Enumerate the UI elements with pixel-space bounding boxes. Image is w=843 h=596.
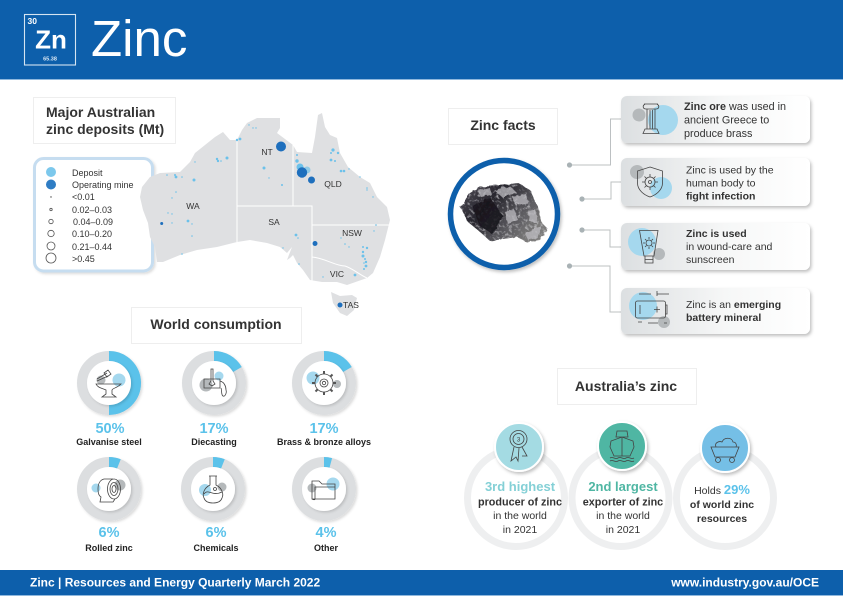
donut: Other 4%: Other xyxy=(314,543,338,553)
Tasmania xyxy=(331,292,357,316)
map legend: 0.21–0.44 xyxy=(72,242,112,252)
donut: Diecasting 17%: 17% xyxy=(199,421,229,437)
heading: World consumption xyxy=(132,308,302,344)
donut: Diecasting 17% xyxy=(187,356,241,447)
fact card: ancient Greece xyxy=(621,96,810,143)
stat: holds 29%: of world zinc xyxy=(690,499,754,511)
heading: Major Australian zinc deposits: Major Australian xyxy=(46,104,155,120)
fact card: wound-care and sunscreen xyxy=(621,223,810,270)
icon: sunscreen tube xyxy=(628,228,665,263)
map legend: Operating mine xyxy=(72,180,134,190)
map legend: <0.01 xyxy=(72,192,95,202)
heading: World consumption: World consumption xyxy=(150,316,282,332)
map legend: >0.45 xyxy=(72,254,95,264)
Australia landmass xyxy=(140,113,390,285)
state labels: QLD xyxy=(324,179,342,189)
icon: casting xyxy=(200,369,226,396)
donut: Galvanise steel 50% xyxy=(76,356,142,447)
stat: 2nd largest exporter xyxy=(583,422,663,536)
heading: Zinc facts xyxy=(448,108,558,144)
footer: www.industry.gov.au/OCE xyxy=(670,576,819,590)
donut: Chemicals 6%: 6% xyxy=(206,525,227,541)
deposit dots xyxy=(166,124,377,278)
state labels: VIC xyxy=(330,269,344,279)
donut: Diecasting 17%: Diecasting xyxy=(191,437,237,447)
map legend: 0.02–0.03 xyxy=(72,205,112,215)
header banner xyxy=(0,0,843,80)
icon: roll xyxy=(92,479,126,502)
footer xyxy=(0,570,843,596)
stat: 3rd highest producer: in the world xyxy=(493,510,547,522)
state labels: TAS xyxy=(343,300,359,310)
map: Australian zinc deposits xyxy=(140,113,390,316)
stat: holds 29% xyxy=(690,424,754,525)
fact card: wound-care and sunscreen: sunscreen xyxy=(686,254,735,266)
stat: 3rd highest producer: in 2021 xyxy=(503,524,537,536)
fact card: ancient Greece: ancient Greece to xyxy=(684,114,769,126)
fact card: ancient Greece: produce brass xyxy=(684,128,753,140)
icon: column xyxy=(632,104,678,135)
periodic table element icon: 30 xyxy=(28,16,37,26)
donut: Chemicals 6% xyxy=(186,462,240,553)
icon: battery xyxy=(629,291,670,328)
donut: Galvanise steel 50%: Galvanise steel xyxy=(76,437,142,447)
footer: Zinc | Resources and Energy Quarterly March 2022 xyxy=(30,576,320,590)
fact card: fight infection xyxy=(621,158,810,206)
stat: 2nd largest exporter: in 2021 xyxy=(606,524,640,536)
donut: Rolled zinc 6% xyxy=(82,462,136,553)
stat: holds 29%: Holds 29% xyxy=(694,482,750,497)
periodic table element icon: 65.38 xyxy=(43,56,57,62)
connector lines xyxy=(567,119,621,312)
stat: 2nd largest exporter: 2nd largest xyxy=(588,479,658,494)
donut: Brass & bronze alloys 17%: Brass & bronze alloys xyxy=(277,437,371,447)
icon: gear xyxy=(306,371,341,395)
donut: Brass & bronze alloys 17%: 17% xyxy=(309,421,339,437)
donut: Galvanise steel 50%: 50% xyxy=(95,421,125,437)
map legend: 0.10–0.20 xyxy=(72,229,112,239)
icon: anvil xyxy=(96,370,126,397)
stat: 2nd largest exporter: exporter of zinc xyxy=(583,496,663,508)
state borders xyxy=(237,140,390,282)
state labels xyxy=(186,147,362,310)
icon: shield xyxy=(630,165,672,199)
fact card: battery mineral xyxy=(621,288,810,334)
icon: flask xyxy=(199,476,226,503)
stat: 3rd highest producer xyxy=(468,423,774,546)
fact card: battery mineral: Zinc is an emerging xyxy=(686,299,781,311)
icon: ship xyxy=(610,431,634,462)
state labels: NSW xyxy=(342,228,362,238)
stat: 3rd highest producer: 3rd highest xyxy=(485,479,556,494)
zinc ore rock xyxy=(460,183,548,242)
donut: Rolled zinc 6%: 6% xyxy=(99,525,120,541)
icon: ribbon: 3 xyxy=(517,436,521,444)
fact card: wound-care and sunscreen: in wound-care and xyxy=(686,241,773,253)
heading: Major Australian zinc deposits xyxy=(34,98,176,144)
fact card: battery mineral: battery mineral xyxy=(686,312,761,324)
icon: ribbon xyxy=(510,430,527,461)
periodic table element icon: Zn xyxy=(35,24,67,54)
operating mine dots xyxy=(160,142,342,308)
stat: holds 29%: resources xyxy=(697,513,747,525)
heading: Zinc facts: Zinc facts xyxy=(470,117,536,133)
periodic table element icon xyxy=(24,14,76,65)
fact card: ancient Greece: Zinc ore was used in xyxy=(684,101,786,113)
icon: folder xyxy=(308,478,340,500)
donut: Rolled zinc 6%: Rolled zinc xyxy=(85,543,133,553)
state labels: SA xyxy=(268,217,280,227)
icon: mine cart xyxy=(711,438,739,462)
fact card: fight infection: human body to xyxy=(686,178,756,190)
map legend: 0.04–0.09 xyxy=(73,217,113,227)
zinc ore circle xyxy=(450,160,558,268)
fact card: fight infection: fight infection xyxy=(686,190,755,202)
title: Zinc xyxy=(91,10,187,67)
state labels: WA xyxy=(186,201,200,211)
map legend: Deposit xyxy=(72,168,103,178)
donut: Other 4%: 4% xyxy=(316,525,337,541)
fact card: wound-care and sunscreen: Zinc is used xyxy=(686,228,747,240)
donut: Chemicals 6%: Chemicals xyxy=(193,543,239,553)
stat: 2nd largest exporter: in the world xyxy=(596,510,650,522)
map legend xyxy=(34,158,152,271)
stat: 3rd highest producer: producer of zinc xyxy=(478,496,562,508)
donut: Brass & bronze alloys 17% xyxy=(277,356,371,447)
state labels: NT xyxy=(261,147,273,157)
heading: Australia's zinc: Australia’s zinc xyxy=(575,378,677,394)
heading: Major Australian zinc deposits: zinc deposits (Mt) xyxy=(46,121,164,137)
fact card: fight infection: Zinc is used by the xyxy=(686,164,774,176)
donut: Other 4% xyxy=(297,462,351,553)
heading: Australia's zinc xyxy=(558,368,696,404)
